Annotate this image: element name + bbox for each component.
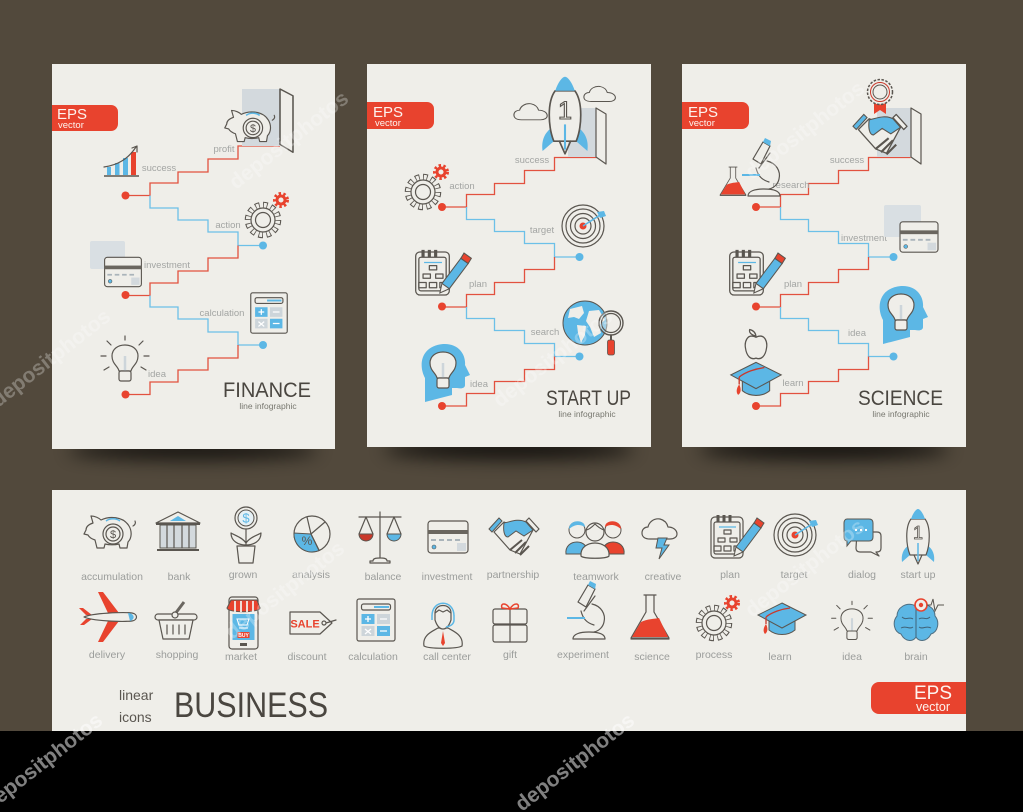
icon: head with bulb (422, 344, 470, 402)
icon: gears (248, 194, 288, 234)
finance subtitle: line infographic (239, 401, 297, 411)
icon: gift (493, 604, 527, 661)
icon: investment: investment (422, 571, 472, 583)
icon: growth chart (104, 146, 139, 176)
start up title: START UP (546, 387, 631, 410)
icon: rocket in doorway (542, 77, 606, 164)
finance stair labels: profit (213, 144, 235, 155)
icon: experiment: experiment (557, 649, 609, 661)
finance stair labels: idea (148, 369, 167, 380)
icon: experiment (557, 581, 609, 661)
start up stair labels: idea (470, 379, 489, 390)
icon: target (562, 205, 606, 247)
icon: plan notebook (416, 250, 471, 295)
science stair labels: plan (784, 279, 802, 290)
icon: discount: discount (287, 651, 327, 663)
icon: head with bulb (880, 286, 928, 344)
science stair labels (773, 155, 887, 389)
icon: calculator (251, 293, 287, 333)
icon: dialog (844, 519, 881, 581)
watermarks: depositphotos (741, 515, 869, 622)
finance card (52, 64, 335, 449)
watermarks: depositphotos (489, 305, 617, 412)
icon: bank: bank (168, 571, 191, 583)
start up badge: EPS (373, 104, 403, 121)
icon: shopping (155, 602, 198, 661)
start up card (367, 64, 651, 447)
icon set card (52, 490, 966, 731)
panel shadows (68, 439, 949, 459)
icon: grown: grown (229, 569, 257, 581)
icon: calculation: calculation (348, 651, 398, 663)
badge: eps vector (871, 682, 966, 714)
icon: learn: learn (768, 651, 792, 663)
icon: call center (423, 603, 471, 663)
icon: target (774, 514, 818, 581)
icon: award ribbon (868, 80, 892, 114)
icon: investment (422, 521, 472, 583)
finance title: FINANCE (223, 379, 311, 402)
finance stair labels (142, 144, 244, 380)
watermarks: depositphotos (741, 77, 869, 184)
icon: brain: brain (904, 651, 928, 663)
icon: balance: balance (365, 571, 402, 583)
icon: partnership (487, 518, 539, 581)
bottom black band (0, 731, 1023, 812)
icon: globe and magnifier (563, 301, 623, 355)
icon: microscope (742, 138, 780, 196)
science staircase (752, 158, 910, 410)
finance badge (52, 105, 118, 131)
finance stair labels: investment (144, 260, 190, 271)
icon: start up: start up (900, 569, 936, 581)
science stair labels: success (830, 155, 864, 166)
icon: piggy bank in doorway (225, 89, 293, 152)
icon: accumulation (81, 516, 143, 583)
icon: calculation (348, 599, 398, 663)
finance staircase (122, 146, 280, 398)
icon: idea: idea (842, 651, 862, 663)
start up stair labels (449, 155, 559, 390)
science stair labels: idea (848, 328, 867, 339)
icon: bank (156, 512, 200, 583)
science subtitle: line infographic (872, 409, 930, 419)
icon: analysis: analysis (292, 569, 330, 581)
icon: science (631, 595, 670, 663)
icon: discount (287, 612, 336, 663)
icon: delivery: delivery (89, 649, 126, 661)
start up badge (367, 102, 434, 129)
finance badge: vector (58, 120, 84, 131)
watermarks: depositphotos (225, 87, 353, 194)
finance badge: EPS (57, 106, 87, 123)
science stair labels: learn (782, 378, 804, 389)
icon: partnership: partnership (487, 569, 539, 581)
icon: balance (359, 512, 402, 583)
icon: brain (894, 599, 944, 663)
start up subtitle: line infographic (558, 409, 616, 419)
science stair labels: research (773, 180, 809, 191)
icon: learn (758, 603, 806, 663)
science badge: vector (689, 118, 715, 129)
icon: light bulb (101, 336, 149, 381)
icon: plan: plan (720, 569, 740, 581)
badge: eps vector: EPS (914, 683, 952, 704)
start up stair labels: action (449, 181, 475, 192)
icon: grown (229, 507, 261, 581)
icon: graduation cap (731, 362, 781, 395)
science card (682, 64, 966, 447)
start up badge: vector (375, 118, 401, 129)
finance stair labels: action (215, 220, 241, 231)
icon: teamwork: teamwork (573, 571, 620, 583)
icon: plan (711, 515, 764, 581)
badge: eps vector: vector (916, 700, 950, 714)
icon: market: market (225, 651, 257, 663)
icon: gift: gift (503, 649, 517, 661)
panel: business icon set (52, 490, 966, 731)
icon: flask (720, 167, 746, 196)
icon: idea (832, 601, 872, 663)
icon: market (225, 597, 260, 663)
icon: call center: call center (423, 651, 471, 663)
icon: teamwork (566, 521, 624, 583)
science stair labels: investment (841, 233, 887, 244)
panel: science (682, 64, 966, 447)
linear icons caption: icons (119, 709, 152, 725)
icon: delivery (79, 592, 136, 661)
icon: analysis (292, 516, 330, 581)
panel: finance (52, 64, 335, 449)
linear icons caption: linear (119, 687, 154, 703)
science badge: EPS (688, 104, 718, 121)
science title: SCIENCE (858, 387, 943, 410)
icon: target: target (781, 569, 808, 581)
icon: cloud left (514, 104, 547, 120)
icon: dialog: dialog (848, 569, 876, 581)
start up stair labels: search (531, 327, 559, 338)
start up stair labels: success (515, 155, 549, 166)
icon: gears (408, 166, 448, 206)
icon: science: science (634, 651, 670, 663)
icon: creative: creative (645, 571, 682, 583)
icon: credit card (90, 241, 141, 287)
icon: start up (900, 509, 936, 581)
linear icons caption (119, 687, 154, 725)
icon: credit card (884, 205, 938, 252)
finance stair labels: success (142, 163, 176, 174)
heading: business: BUSINESS (174, 686, 328, 725)
icon: cloud right (584, 86, 615, 102)
watermarks (0, 77, 869, 812)
icon: shopping: shopping (156, 649, 198, 661)
icon: process: process (696, 649, 732, 661)
science badge (682, 102, 749, 129)
finance stair labels: calculation (200, 308, 244, 319)
watermarks: depositphotos (221, 537, 349, 644)
icon: handshake in doorway (853, 108, 921, 164)
icon: accumulation: accumulation (81, 571, 143, 583)
icon: process (696, 596, 738, 661)
start up staircase (438, 158, 596, 410)
icon: apple (745, 330, 767, 359)
panel: start up (367, 64, 651, 447)
start up stair labels: target (530, 225, 555, 236)
start up stair labels: plan (469, 279, 487, 290)
icon: creative (642, 519, 682, 583)
icon: plan notebook (730, 250, 785, 295)
